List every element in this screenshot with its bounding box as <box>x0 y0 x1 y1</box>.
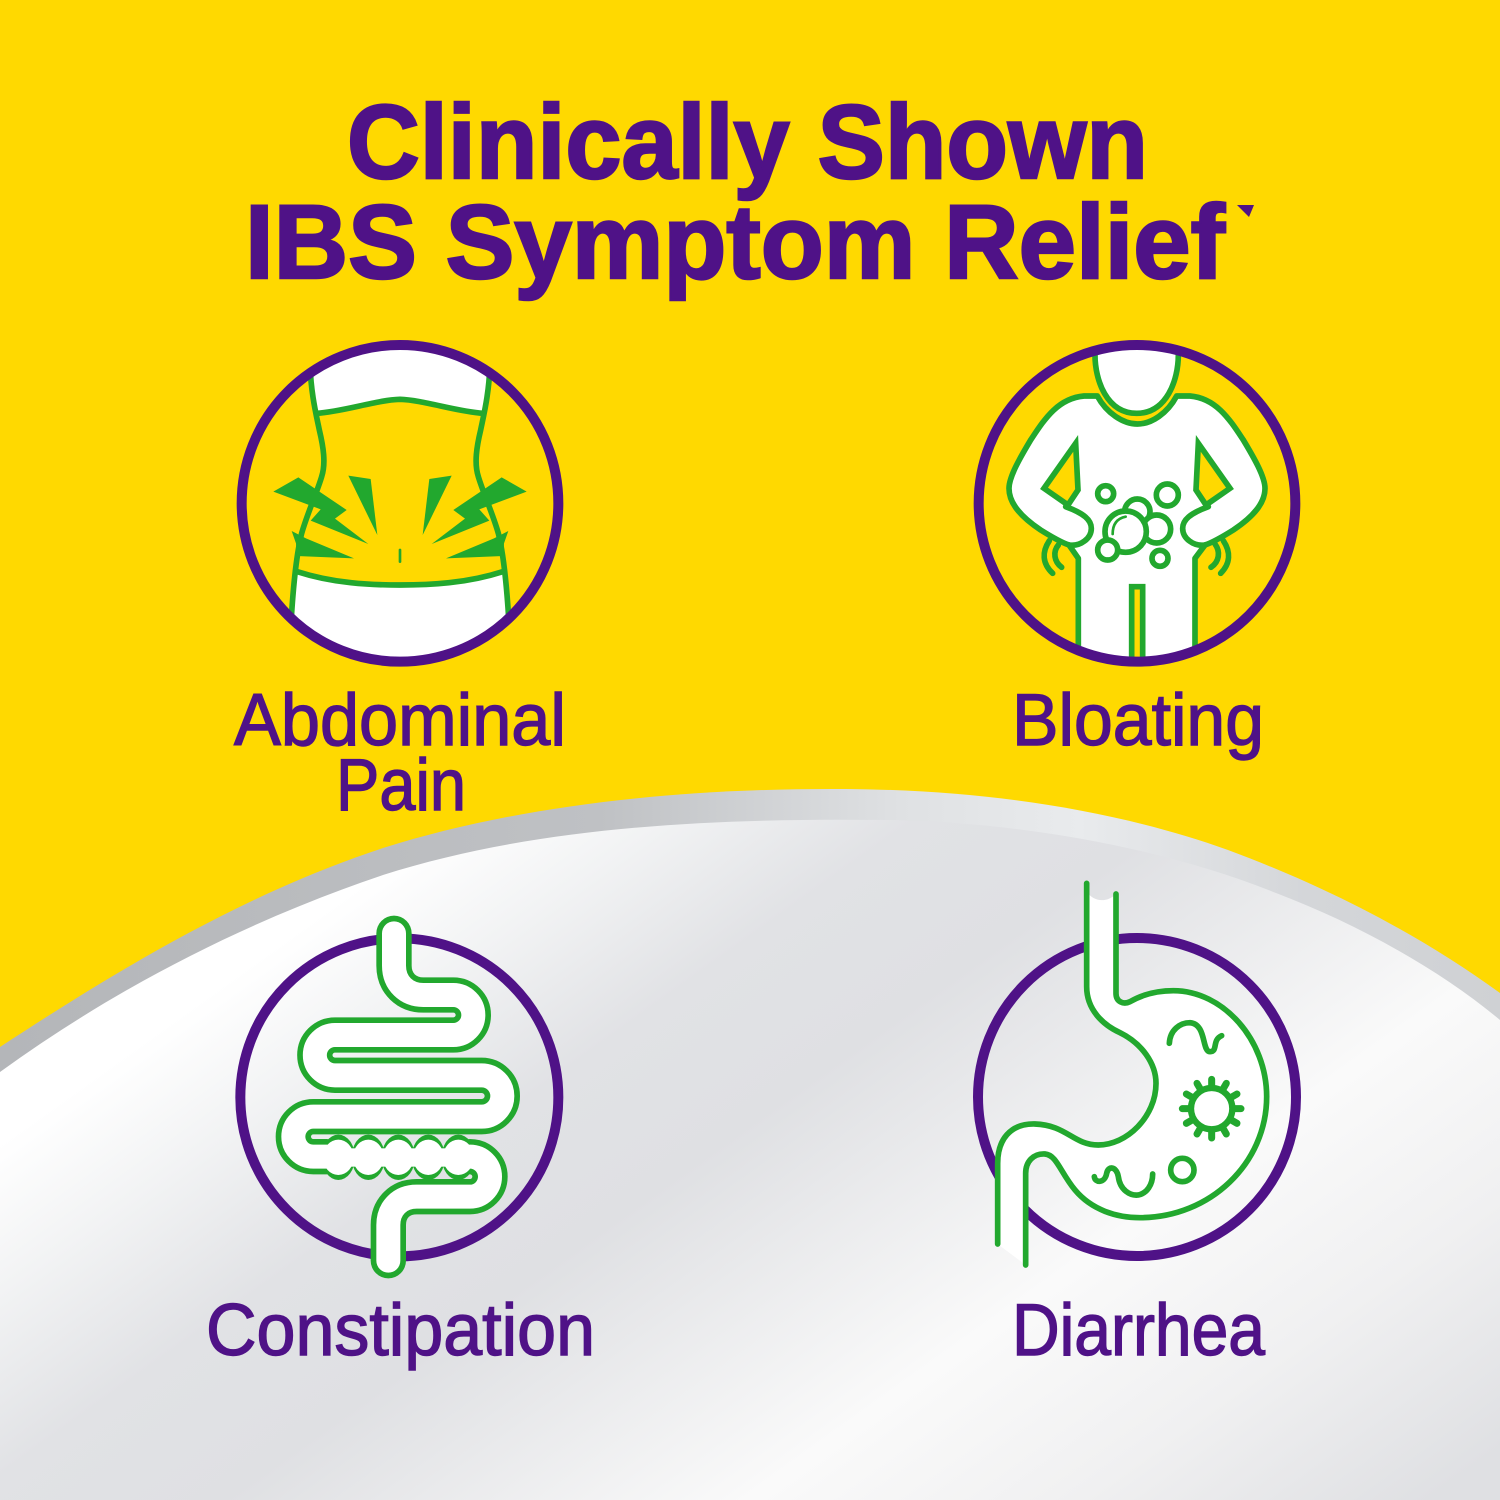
icon: person with bloated stomach <box>979 337 1295 677</box>
intestine interior <box>293 933 502 1261</box>
panel: constipation <box>206 933 595 1371</box>
label: abdominal pain <box>234 680 566 826</box>
body <box>1009 396 1265 677</box>
label: abdominal pain: Pain <box>336 745 466 826</box>
side marks <box>1211 541 1229 573</box>
head <box>1095 337 1178 413</box>
stomach outline <box>998 883 1156 1244</box>
right pain bolts <box>423 476 527 558</box>
icon: intestines <box>240 933 558 1261</box>
stomach fill <box>998 892 1267 1265</box>
bubbles <box>1098 484 1178 566</box>
icon: abdomen with pain bolts <box>242 330 558 663</box>
arm gaps <box>1196 443 1230 505</box>
icon: stomach with germs <box>978 883 1296 1265</box>
navel <box>396 550 404 562</box>
germ: lower worm <box>1094 1168 1153 1195</box>
lower white panel <box>0 820 1500 1500</box>
title <box>245 84 1254 301</box>
panel: abdominal pain <box>234 330 566 826</box>
silver swoosh band <box>0 789 1500 1500</box>
label: abdominal pain: Abdominal <box>234 680 566 761</box>
title: Clinically Shown <box>347 84 1148 201</box>
hands <box>1183 507 1208 545</box>
title: IBS Symptom Relief <box>245 184 1226 301</box>
left pain bolts <box>273 476 377 558</box>
germ: upper worm <box>1169 1023 1222 1052</box>
label: diarrhea: Diarrhea <box>1012 1290 1265 1371</box>
label: constipation: Constipation <box>206 1290 595 1371</box>
germ: ring <box>1171 1158 1194 1182</box>
intestine outline <box>293 933 502 1261</box>
leg gap <box>1132 587 1143 677</box>
scalloped colon interior <box>323 1140 474 1175</box>
germ: virus <box>1182 1079 1241 1138</box>
panel: diarrhea <box>978 883 1296 1371</box>
scalloped colon outline <box>322 1135 475 1180</box>
label: bloating: Bloating <box>1012 680 1264 761</box>
panel: bloating <box>979 337 1295 761</box>
